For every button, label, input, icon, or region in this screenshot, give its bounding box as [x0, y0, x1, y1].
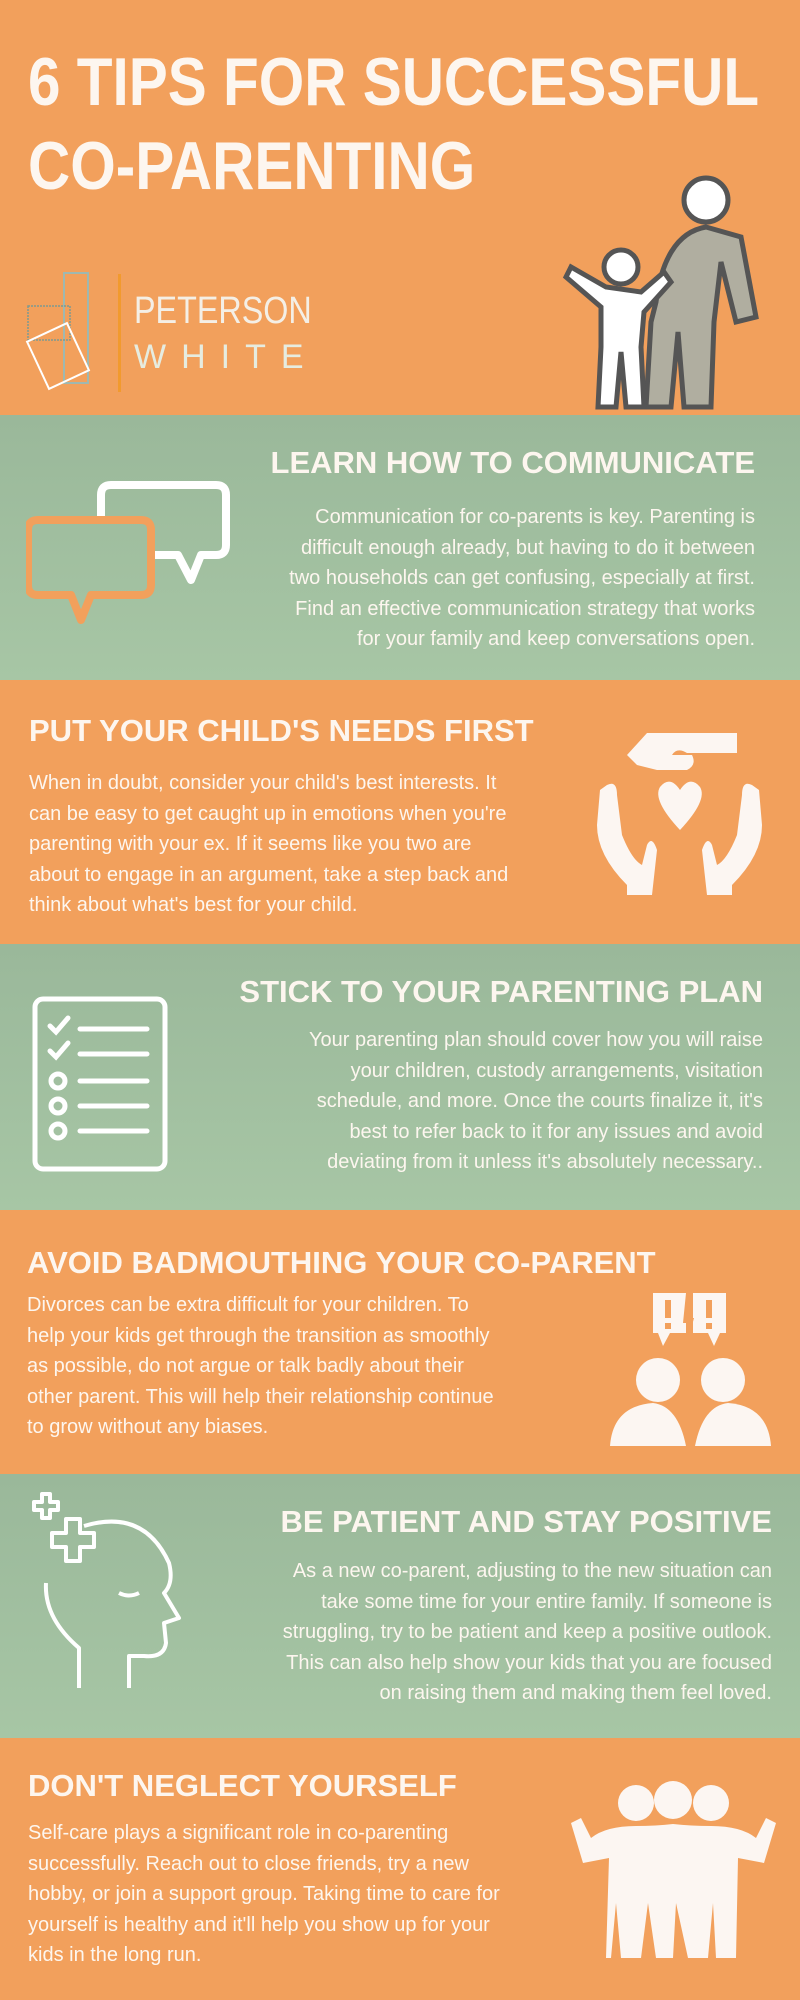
logo: WHITE: [134, 338, 319, 376]
text block: two households can get confusing, especially at first.: [289, 567, 755, 589]
panel: avoid badmouthing: [0, 1210, 800, 1474]
panel: be patient: [0, 1474, 800, 1738]
panel: child's needs: [0, 680, 800, 944]
text block: [309, 1029, 763, 1173]
text block: Self-care plays a significant role in co-parenting: [28, 1822, 448, 1844]
icon: speech bubbles: [26, 481, 230, 624]
text block: difficult enough already, but having to do it between: [301, 536, 755, 558]
icon: hands with heart: [597, 733, 762, 895]
icon: head with plus signs: [32, 1492, 181, 1688]
text block: think about what's best for your child.: [29, 894, 357, 916]
panel: communicate: [0, 415, 800, 680]
text block: [289, 506, 755, 650]
text block: other parent. This will help their relationship continue: [27, 1386, 494, 1408]
header panel: [0, 0, 800, 415]
text block: kids in the long run.: [28, 1944, 201, 1966]
text block: [28, 1822, 500, 1966]
text block: [27, 1294, 494, 1438]
text block: Divorces can be extra difficult for your children. To: [27, 1294, 469, 1316]
text block: to grow without any biases.: [27, 1416, 268, 1438]
text block: parenting with your ex. If it seems like you two are: [29, 833, 471, 855]
icon: parent and child: [562, 176, 759, 410]
heading: AVOID BADMOUTHING YOUR CO-PARENT: [27, 1245, 656, 1280]
logo: PETERSON: [134, 290, 312, 332]
text block: Find an effective communication strategy that works: [295, 598, 755, 620]
text block: Your parenting plan should cover how you will raise: [309, 1029, 763, 1051]
text block: When in doubt, consider your child's best interests. It: [29, 772, 496, 794]
icon: checklist: [32, 996, 168, 1172]
icon: group of friends: [571, 1781, 776, 1958]
text block: take some time for your entire family. If someone is: [321, 1590, 772, 1612]
text block: [283, 1560, 772, 1704]
text block: as possible, do not argue or talk badly about their: [27, 1355, 464, 1377]
icon: arguing people: [610, 1293, 771, 1446]
text block: schedule, and more. Once the courts finalize it, it's: [317, 1090, 763, 1112]
text block: can be easy to get caught up in emotions when you're: [29, 802, 506, 824]
heading: STICK TO YOUR PARENTING PLAN: [239, 974, 763, 1009]
text block: deviating from it unless it's absolutely necessary..: [327, 1151, 763, 1173]
text block: As a new co-parent, adjusting to the new situation can: [293, 1560, 772, 1582]
logo: [26, 272, 319, 392]
title: [28, 44, 759, 204]
text block: This can also help show your kids that you are focused: [286, 1652, 772, 1674]
text block: your children, custody arrangements, visitation: [351, 1060, 763, 1082]
title: CO-PARENTING: [28, 128, 475, 204]
title: 6 TIPS FOR SUCCESSFUL: [28, 44, 759, 120]
text block: yourself is healthy and it'll help you show up for your: [28, 1914, 490, 1936]
text block: best to refer back to it for any issues and avoid: [349, 1120, 763, 1142]
text block: on raising them and making them feel loved.: [380, 1682, 772, 1704]
heading: DON'T NEGLECT YOURSELF: [28, 1768, 457, 1803]
text block: help your kids get through the transition as smoothly: [27, 1324, 489, 1346]
text block: about to engage in an argument, take a step back and: [29, 864, 508, 886]
text block: struggling, try to be patient and keep a positive outlook.: [283, 1621, 772, 1643]
heading: BE PATIENT AND STAY POSITIVE: [280, 1504, 772, 1539]
panel: don't neglect yourself: [0, 1738, 800, 2000]
text block: hobby, or join a support group. Taking time to care for: [28, 1883, 500, 1905]
text block: for your family and keep conversations open.: [357, 628, 755, 650]
text block: successfully. Reach out to close friends, try a new: [28, 1852, 469, 1874]
heading: PUT YOUR CHILD'S NEEDS FIRST: [29, 713, 534, 748]
heading: LEARN HOW TO COMMUNICATE: [271, 445, 755, 480]
panel: parenting plan: [0, 944, 800, 1210]
text block: Communication for co-parents is key. Parenting is: [315, 506, 755, 528]
text block: [29, 772, 508, 916]
